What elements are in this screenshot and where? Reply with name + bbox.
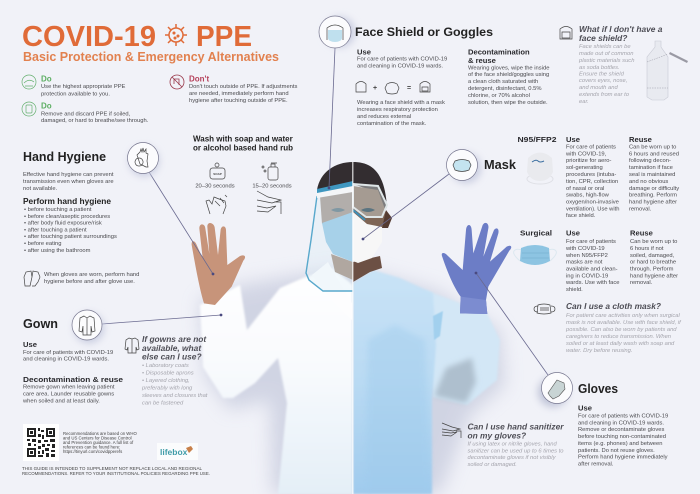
panel: mask: hand hygiene after xyxy=(630,274,678,280)
panel: mask: For care of patients xyxy=(566,144,616,150)
panel: mask: prioritize for aero- xyxy=(566,158,611,164)
subtitle: Basic Protection & Emergency Alternatives xyxy=(23,50,279,64)
panel: gloves: patients. Do not reuse gloves. xyxy=(578,448,655,454)
panel: mask: procedures (intuba- xyxy=(566,172,616,178)
title xyxy=(22,21,252,53)
do block 1: protection available to you. xyxy=(41,91,110,97)
decontamination: Decontamination xyxy=(468,48,530,56)
blue gown sleeve xyxy=(425,290,500,405)
hair xyxy=(317,162,387,208)
panel: mask: with COVID-19, xyxy=(565,151,607,157)
cloth answer: soiled or at least daily wash with soap and xyxy=(566,341,675,347)
left hand, bare xyxy=(192,223,245,305)
heading: Mask xyxy=(484,157,517,172)
mask note: increases respiratory protection xyxy=(357,107,438,113)
panel: mask: face shield. xyxy=(566,213,596,219)
callout line: gloves xyxy=(475,272,548,375)
answer: extends from ear to xyxy=(579,92,630,98)
panel: gloves: For care of patients with COVID-19 xyxy=(578,414,668,420)
center divider xyxy=(352,162,353,494)
panel: face shield xyxy=(319,16,688,127)
references note: Recommendations are based on WHO xyxy=(63,431,137,436)
panel: gloves xyxy=(442,372,668,468)
answer: plastic materials such xyxy=(578,58,634,64)
references note: references can be found here: xyxy=(63,444,120,450)
surgical mask illustration xyxy=(514,245,556,265)
panel: gown xyxy=(22,310,208,406)
neck right xyxy=(353,256,382,282)
panel: wash xyxy=(193,134,293,214)
panel: mask: ing in COVID-19 xyxy=(566,274,608,280)
panel: mask: soiled, damaged, xyxy=(630,253,675,259)
panel: gloves: Perform hand hygiene immediately xyxy=(578,454,668,460)
dont block: Don't xyxy=(189,74,209,84)
equation icons: = xyxy=(407,85,411,92)
panel: mask: ventilation). Use with xyxy=(566,206,619,212)
panel: mask: seal is maintained xyxy=(629,172,675,178)
answer: Ensure the shield xyxy=(579,72,625,78)
center placket shading xyxy=(365,325,430,494)
panel: face shield: For care of patients with COVID-19 xyxy=(357,56,447,62)
panel: mask: 6 hours and reused xyxy=(629,151,679,157)
icon circle: mask xyxy=(446,150,481,183)
N95 mask xyxy=(353,212,382,263)
alternative question: If gowns are not xyxy=(142,334,207,344)
icon circle: gloves xyxy=(538,372,572,407)
face shield xyxy=(306,181,353,291)
bullet list: • before eating xyxy=(24,241,61,247)
bullet list: • before clean/aseptic procedures xyxy=(24,214,110,220)
sanitizer answer: If using latex or nitrile gloves, hand xyxy=(468,442,558,448)
question: What if I don't have a xyxy=(579,24,663,34)
callout line: hand hygiene xyxy=(149,172,214,275)
intro text: transmission even when gloves are xyxy=(23,179,114,185)
alternative list: • Disposable aprons xyxy=(142,370,194,376)
panel: mask: when N95/FFP2 xyxy=(565,253,608,259)
panel: mask: Can be worn up to xyxy=(629,144,676,150)
label: 15-20: 15–20 seconds xyxy=(252,184,292,190)
panel: face shield: of the face shield/goggles using xyxy=(468,72,549,78)
answer: ear. xyxy=(579,99,589,105)
surgical use: Use xyxy=(566,228,580,238)
panel: mask: with COVID-19 xyxy=(565,246,605,252)
disclaimer: RECOMMENDATIONS. REFER TO YOUR INSTITUTIONAL POLICIES REGARDING PPE USE. xyxy=(22,471,210,476)
heading: Gown xyxy=(23,317,58,331)
panel: gloves: and cleaning in COVID-19 wards. xyxy=(578,420,664,426)
answer: and mouth and xyxy=(579,85,618,91)
bullet list: • after touching a patient xyxy=(24,228,87,234)
panel: mask: or hard to breathe xyxy=(630,260,676,266)
do block 2: Do xyxy=(41,102,52,110)
callout line: mask xyxy=(362,174,449,240)
use: Use xyxy=(357,48,371,56)
heading: Gloves xyxy=(578,381,618,396)
equation icons: + xyxy=(373,85,377,92)
panel: gown: care area. Launder reusable gowns xyxy=(23,392,114,398)
right hand, blue glove xyxy=(442,223,511,314)
title: PPE xyxy=(196,21,252,53)
footer xyxy=(22,424,210,476)
panel: face shield: chlorine, or 70% alcohol xyxy=(468,93,530,99)
do block 1: Use the highest appropriate PPE xyxy=(41,84,126,90)
sanitizer question: on my gloves? xyxy=(468,430,526,440)
references note: and US Centers for Disease Control xyxy=(63,436,132,440)
bullet list: • after body fluid exposure/risk xyxy=(24,220,102,226)
sanitizer answer: soiled or damaged. xyxy=(468,462,517,468)
icon circle: gown xyxy=(72,310,104,343)
panel: gown: when soiled and at least daily. xyxy=(22,398,100,404)
callout line: gown xyxy=(102,314,222,324)
icon: do discard xyxy=(22,102,36,116)
do block 2 xyxy=(22,102,149,124)
mask note: contamination of the mask. xyxy=(357,121,427,127)
alternative list: preferably with long xyxy=(141,386,193,392)
surgical label: Surgical xyxy=(520,228,552,238)
cloth answer: mask is not available. Use with face shield, if xyxy=(566,320,682,326)
figure shadow xyxy=(200,268,505,494)
dont block: are needed, immediately perform hand xyxy=(189,91,289,97)
bullet list: • after using the bathroom xyxy=(24,248,91,254)
panel: mask: breathing. Perform xyxy=(629,192,677,198)
panel: face shield: Wearing gloves, wipe the inside xyxy=(468,66,549,72)
alternative list: can be fastened xyxy=(142,400,184,406)
dont block xyxy=(170,74,298,104)
answer: made out of common xyxy=(579,51,633,57)
icon: hand rub xyxy=(257,191,281,214)
panel: mask: wards. Use with face xyxy=(565,280,619,286)
bullet list: • after touching patient surroundings xyxy=(24,234,117,240)
panel: mask: For care of patients xyxy=(566,239,616,245)
alternative list: • Laboratory coats xyxy=(142,363,189,369)
panel: gloves: Remove or decontaminate gloves xyxy=(578,427,664,433)
callout line: face shield xyxy=(328,48,335,189)
icon: gloves xyxy=(24,271,40,286)
title: COVID-19 xyxy=(22,21,156,53)
heading: Hand Hygiene xyxy=(23,149,106,164)
N95 reuse: Reuse xyxy=(629,135,652,144)
face left xyxy=(320,190,353,224)
lifebox logo: lifebox xyxy=(160,447,188,457)
neck left xyxy=(331,254,353,280)
surgical reuse: Reuse xyxy=(630,228,653,238)
panel: gown: For care of patients with COVID-19 xyxy=(23,350,113,356)
mask note: Wearing a face shield with a mask xyxy=(357,100,445,106)
panel: mask: damage or difficulty xyxy=(629,186,679,192)
panel: mask: Can be worn up to xyxy=(630,239,677,245)
panel: gloves: items (e.g. phones) and between xyxy=(578,441,662,447)
N95 use: Use xyxy=(566,135,580,144)
do block 1: Do xyxy=(41,74,52,84)
sleeve underside xyxy=(434,358,476,403)
intro text: not available. xyxy=(23,186,58,192)
label: 20-30: 20–30 seconds xyxy=(195,184,235,190)
panel: mask xyxy=(446,135,682,354)
do block 1 xyxy=(22,74,126,97)
icon: gown small xyxy=(125,338,139,353)
dont block: hygiene after touching outside of PPE. xyxy=(189,98,288,104)
bottle illustration xyxy=(647,41,688,100)
panel: mask: 6 hours if not xyxy=(630,246,664,252)
figure: healthcare worker in PPE xyxy=(192,162,511,494)
panel: mask: through. Perform xyxy=(630,266,674,272)
intro text: Effective hand hygiene can prevent xyxy=(23,172,114,178)
icon: sanitizer hands xyxy=(442,423,461,438)
cloth answer: For patient care activities only when surgical xyxy=(566,313,680,319)
sanitizer question: Can I use hand sanitizer xyxy=(468,422,564,432)
glove note: hygiene before and after glove use. xyxy=(44,279,135,285)
icon: dont touch xyxy=(170,75,184,89)
equation icons xyxy=(356,82,430,94)
white gown sleeve and body xyxy=(200,268,353,494)
QR code xyxy=(23,424,59,461)
answer: covers eyes, nose, xyxy=(579,78,627,84)
panel: gown: and cleaning in COVID-19 wards. xyxy=(23,356,109,362)
panel: mask: masks are not xyxy=(566,260,603,266)
panel: face shield: and cleaning in COVID-19 wards. xyxy=(357,64,443,70)
panel: hand hygiene xyxy=(23,142,159,286)
panel: face shield: solution, then wipe the outside. xyxy=(468,100,548,106)
icon: soap: SOAP xyxy=(213,172,222,176)
dont block: Don't touch outside of PPE. If adjustments xyxy=(189,84,298,90)
white collar xyxy=(312,262,352,320)
icon circle: face shield xyxy=(319,16,355,48)
alternative list: • Layered clothing, xyxy=(142,378,190,384)
icon: sanitizer bottle xyxy=(262,163,278,180)
surgical mask xyxy=(322,212,353,262)
icon: cloth mask xyxy=(534,304,555,314)
cloth question: Can I use a cloth mask? xyxy=(566,301,661,311)
panel: mask: and no obvious xyxy=(629,179,668,185)
sanitizer answer: sanitizer can be used up to 6 times to xyxy=(468,448,564,454)
heading: Face Shield or Goggles xyxy=(355,25,493,39)
panel: mask: swabs, high-flow xyxy=(566,192,610,198)
panel: gloves: before touching non-contaminated xyxy=(578,434,666,440)
N95 strap xyxy=(353,210,365,220)
panel: face shield: a clean cloth saturated with xyxy=(468,79,538,85)
panel: mask: tion, CPR, collection xyxy=(566,179,618,185)
panel: mask: available and clean- xyxy=(566,266,618,272)
alternative list: sleeves and closures that xyxy=(142,393,208,399)
decontamination: Decontamination & reuse xyxy=(23,375,123,384)
panel: face shield: detergent, disinfectant, 0.5% xyxy=(468,86,541,92)
face right xyxy=(353,186,386,228)
panel: gloves: after removal. xyxy=(578,462,614,468)
alternative question: available, what xyxy=(142,343,202,353)
bullet list: • before touching a patient xyxy=(24,207,92,213)
lifebox logo xyxy=(157,443,198,460)
panel: mask: tamination if face xyxy=(629,165,673,171)
panel: gown: Remove gown when leaving patient xyxy=(23,384,115,390)
goggles xyxy=(353,184,387,217)
use: Use xyxy=(23,340,37,349)
do block 2: damaged, or hard to breathe/see through. xyxy=(41,118,149,124)
alternative question: else can I use? xyxy=(142,352,202,362)
icon: washing hands xyxy=(206,195,227,214)
question: face shield? xyxy=(579,33,627,43)
mask note: and reduces external xyxy=(357,114,411,120)
cloth answer: water. Dry before reusing. xyxy=(566,348,632,354)
subheading: Perform hand hygiene xyxy=(23,197,112,206)
cloth answer: possible. Can also be worn by patients and xyxy=(565,327,677,333)
decontamination: & reuse xyxy=(468,56,496,65)
eyes xyxy=(331,208,375,212)
do block 2: Remove and discard PPE if soiled, xyxy=(41,111,131,117)
icon: virus xyxy=(165,24,187,46)
N95 illustration xyxy=(527,152,553,184)
answer: Face shields can be xyxy=(579,44,631,50)
blue gown body xyxy=(353,270,436,494)
heading: or alcohol based hand rub xyxy=(193,144,293,152)
answer: as soda bottles. xyxy=(579,65,620,71)
cloth answer: caregivers to reduce transmission. When xyxy=(566,334,671,340)
icon: do highest PPE xyxy=(22,75,36,89)
use: Use xyxy=(578,404,592,412)
heading: Wash with soap and water xyxy=(193,134,293,144)
panel: mask: oxygen/non-invasive xyxy=(566,200,619,206)
disclaimer: THIS GUIDE IS INTENDED TO SUPPLEMENT NOT REPLACE LOCAL AND REGIONAL xyxy=(22,466,203,471)
panel: mask: shield. xyxy=(566,287,583,293)
gown stripe xyxy=(433,311,443,340)
panel: mask: sol-generating xyxy=(566,165,603,171)
icon: small shield xyxy=(560,26,572,39)
ear xyxy=(382,210,392,228)
panel: mask: removal. xyxy=(630,280,653,286)
glove note: When gloves are worn, perform hand xyxy=(44,272,139,278)
references note: https://tinyurl.com/covidpperefs xyxy=(63,449,122,454)
N95 label: N95/FFP2 xyxy=(518,135,556,144)
references note: and Prevention guidance. A full list of xyxy=(63,440,134,445)
panel: mask: following decon- xyxy=(629,158,671,164)
icon circle: hand hygiene xyxy=(128,142,159,176)
panel: mask: hand hygiene after xyxy=(629,200,677,206)
panel: mask: removal. xyxy=(629,206,652,212)
sanitizer answer: decontaminate gloves if not visibly xyxy=(468,455,557,461)
panel: mask: of nasal or oral xyxy=(566,186,604,192)
